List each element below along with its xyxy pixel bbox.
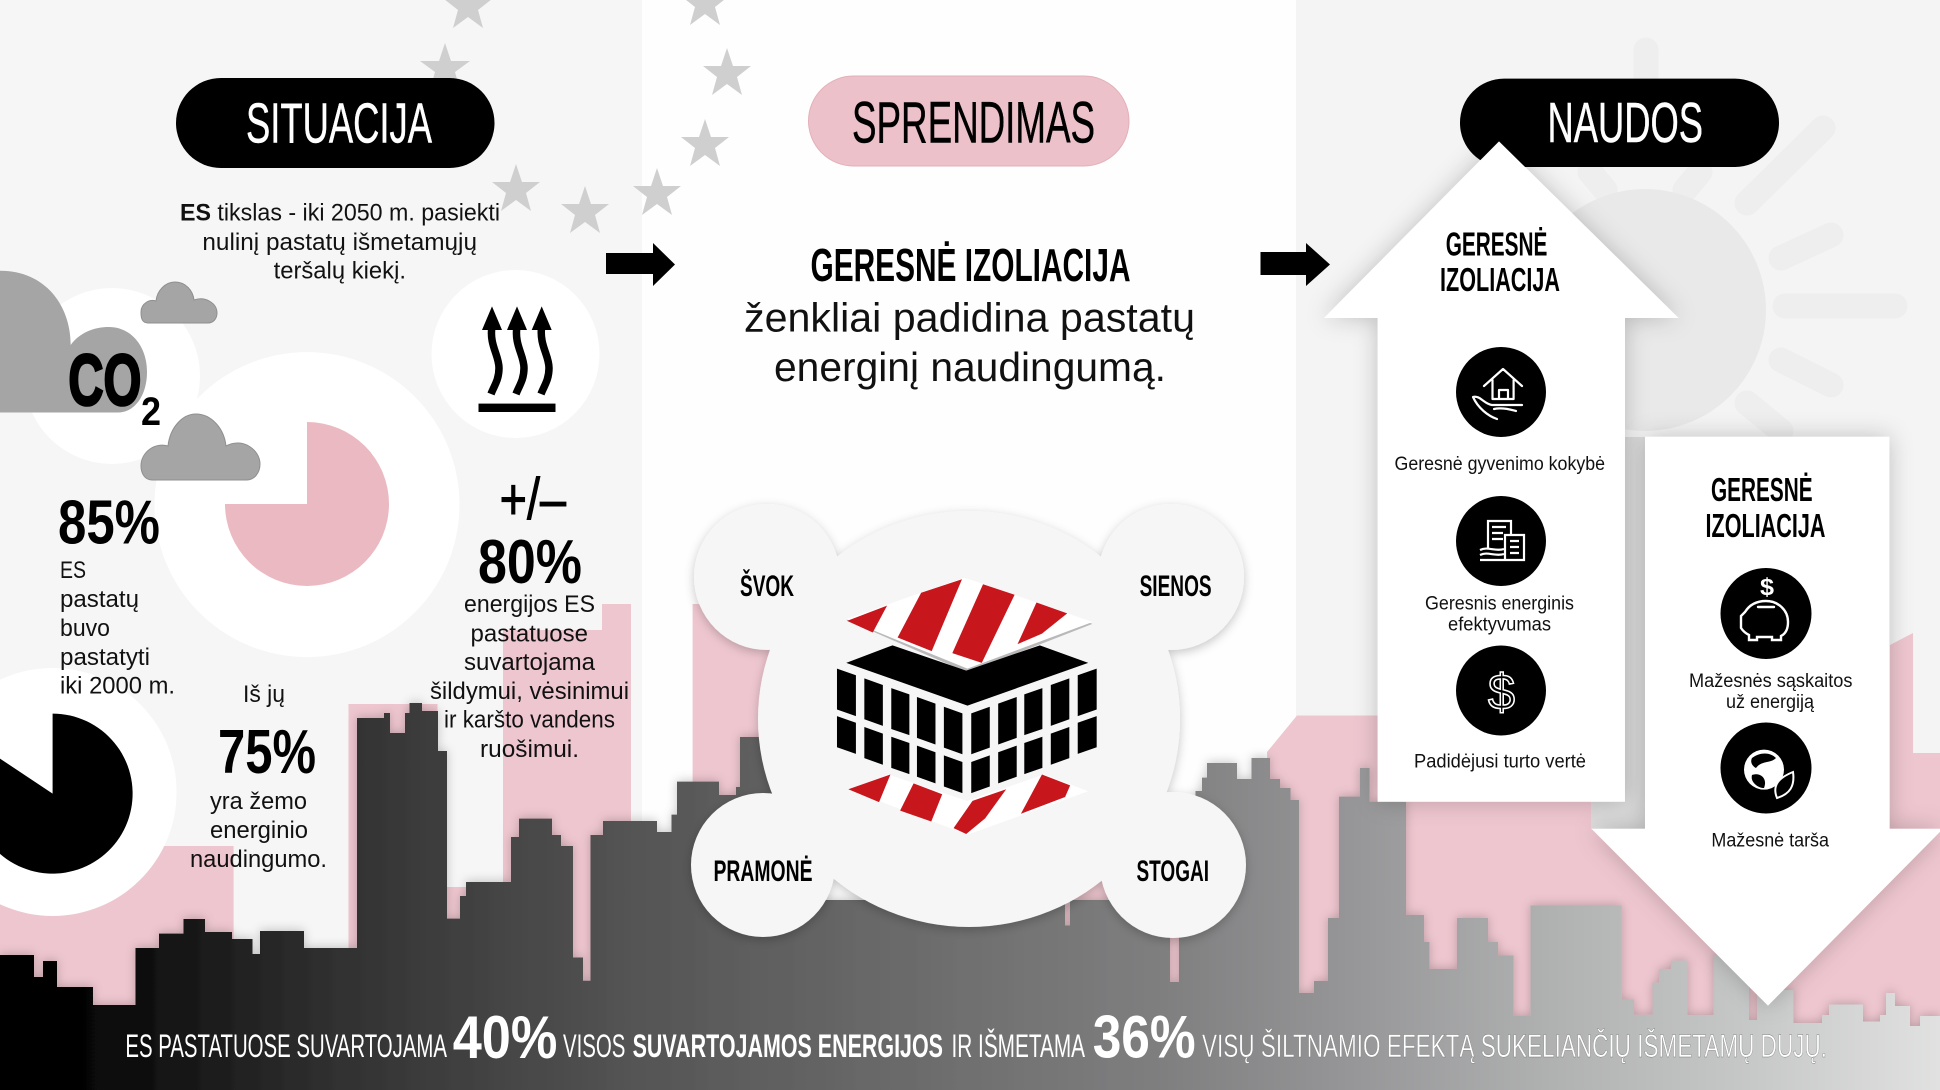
text: EU goal (180, 200, 500, 285)
bottom statement: SUVARTOJAMOS ENERGIJOS (633, 1028, 943, 1064)
icon: CO2 cloud circle: CO (68, 341, 141, 421)
arrow shape: down (1592, 437, 1940, 1006)
floor insulation sheet (848, 774, 1088, 835)
icon: CO2 cloud circle: 2 (141, 390, 161, 434)
skyline silhouette (0, 703, 1940, 1090)
panel: sprendimas (691, 76, 1246, 938)
panel: centre white column (642, 0, 1296, 1090)
panel: up arrow benefits (1324, 141, 1679, 802)
heading pill: situacija (176, 78, 494, 168)
label: less pollution: Mažesnė tarša (1711, 830, 1829, 851)
roof insulation sheet (846, 577, 1092, 673)
icon: efficient buildings (1456, 496, 1546, 586)
text: 85% description: ES (60, 557, 86, 584)
heading pill: situacija: SITUACIJA (246, 92, 432, 156)
text: 75% block (190, 681, 327, 873)
arrow shape: up (1324, 141, 1679, 802)
text: EU goal: ES tikslas - iki 2050 m. pasiekti (180, 200, 500, 227)
icon: CO2 cloud circle (0, 271, 200, 464)
text: 85% description: iki 2000 m. (60, 673, 175, 700)
hub labels: STOGAI (1136, 855, 1209, 888)
label: property value: Padidėjusi turto vertė (1414, 752, 1586, 773)
text: 75% block: naudingumo. (190, 846, 327, 873)
text: 80% block: pastatuose (470, 620, 588, 647)
arrow: solution to benefits (1260, 243, 1330, 286)
text: 85% description: pastatų (60, 586, 139, 613)
text: 75% block: 75% (218, 718, 316, 787)
hub: central circle with four satellites (691, 504, 1246, 938)
chart: black pie 75% (0, 668, 177, 916)
text: solution statement: GERESNĖ IZOLIACIJA (810, 239, 1130, 291)
icon: faint sun (1524, 50, 1895, 431)
text: 85% description: buvo (60, 615, 110, 642)
text: EU goal: teršalų kiekį. (274, 258, 406, 285)
text: 85% description (60, 557, 175, 700)
bottom statement: IR IŠMETAMA (952, 1028, 1085, 1064)
hub labels (714, 569, 1212, 888)
hub labels: SIENOS (1140, 570, 1212, 603)
heading: up arrow: IZOLIACIJA (1440, 261, 1560, 298)
label: energy efficiency (1425, 594, 1574, 635)
text: 80% block (430, 467, 629, 763)
heading pill: naudos: NAUDOS (1548, 91, 1703, 155)
label: quality of life: Geresnė gyvenimo kokybė (1394, 454, 1605, 475)
icon: piggy bank (1720, 568, 1812, 659)
heading: down arrow (1706, 471, 1826, 544)
text: 80% block: ir karšto vandens (444, 706, 615, 734)
heading: up arrow: GERESNĖ (1446, 225, 1547, 262)
text: solution statement: energinį naudingumą. (774, 344, 1166, 390)
bottom statement: 36% (1093, 1004, 1196, 1070)
text: EU goal: nulinį pastatų išmetamųjų (202, 229, 477, 256)
text: 75% block: energinio (210, 817, 308, 844)
text: 75% block: Iš jų (243, 681, 285, 708)
text: 80% block: šildymui, vėsinimui (430, 678, 629, 705)
building block (837, 645, 1097, 793)
text: 75% block: yra žemo (210, 788, 307, 815)
bottom statement (125, 1004, 1827, 1071)
heading: up arrow (1440, 225, 1560, 298)
icon: dollar (1456, 646, 1546, 736)
text: 80% block: suvartojama (464, 649, 595, 676)
heading pill: sprendimas: SPRENDIMAS (852, 90, 1095, 155)
text: 80% block: ruošimui. (480, 736, 579, 763)
text: 80% block: energijos ES (464, 591, 595, 618)
panel: down arrow benefits (1592, 437, 1940, 1006)
icon: heat arrows (432, 270, 600, 438)
icon: EU stars (420, 0, 751, 233)
icon: dollar: $ (1488, 664, 1515, 720)
bottom statement: 40% (453, 1004, 557, 1071)
heading: down arrow: IZOLIACIJA (1706, 507, 1826, 544)
text: solution statement: ženkliai padidina pastatų (744, 295, 1195, 341)
hub labels: PRAMONĖ (714, 855, 812, 888)
icon: piggy bank: $ (1760, 574, 1775, 601)
bottom statement: ES PASTATUOSE SUVARTOJAMA (125, 1028, 447, 1064)
hub labels: ŠVOK (740, 569, 794, 603)
text: 85% description: pastatyti (60, 644, 150, 671)
text: solution statement (744, 239, 1195, 390)
heading pill: naudos (1460, 79, 1779, 167)
stat: 85%: 85% (58, 489, 160, 558)
pink backdrop skyline (0, 437, 1940, 1090)
text: 80% block: 80% (478, 528, 582, 597)
label: lower bills: už energiją (1726, 692, 1814, 713)
label: lower bills (1689, 671, 1852, 713)
arrow: situation to solution (606, 243, 675, 286)
bottom statement: VISOS (563, 1028, 625, 1064)
heading pill: sprendimas (808, 76, 1129, 166)
label: energy efficiency: Geresnis energinis (1425, 594, 1574, 615)
heading: down arrow: GERESNĖ (1711, 471, 1813, 508)
chart: pink pie 85% (154, 352, 460, 657)
label: energy efficiency: efektyvumas (1448, 614, 1551, 635)
icon: medium cloud (141, 414, 260, 480)
icon: house in hand (1456, 347, 1546, 437)
text: 80% block: +/– (500, 467, 567, 532)
label: lower bills: Mažesnės sąskaitos (1689, 671, 1852, 692)
icon: insulated building (837, 577, 1097, 835)
icon: globe with leaf (1720, 722, 1812, 814)
icon: small cloud (141, 282, 217, 323)
